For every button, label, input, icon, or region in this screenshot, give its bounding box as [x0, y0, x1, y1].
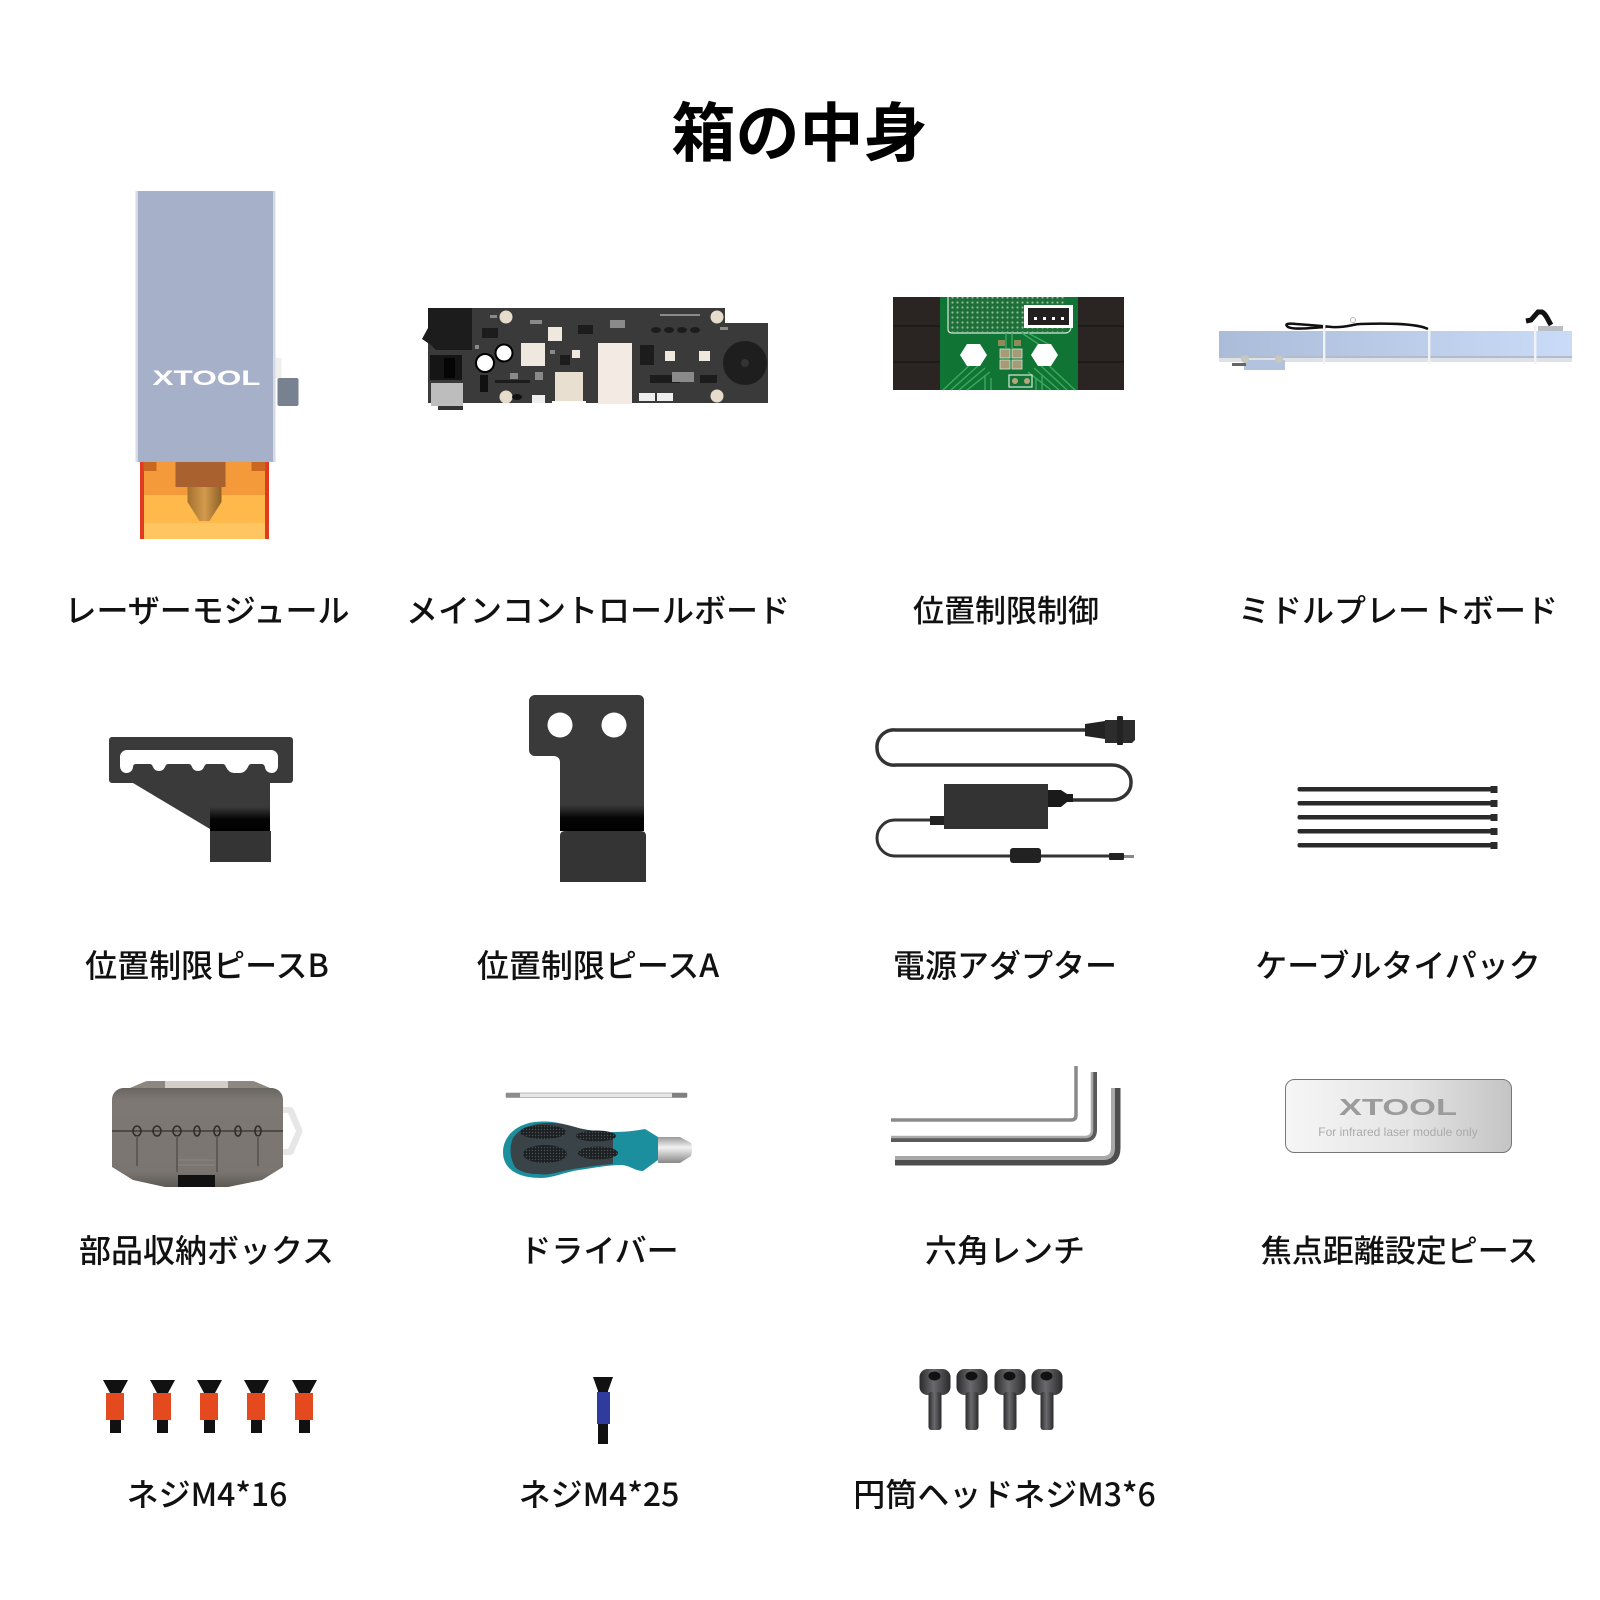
icon: four cap head screws [920, 1369, 1062, 1430]
icon: steel plate: For infrared laser module only [1318, 1125, 1478, 1139]
icon: laser module: XTOOL [152, 367, 261, 390]
icon: steel plate: XTOOL [1339, 1094, 1457, 1120]
panel: hex wrench [891, 1066, 1116, 1272]
panel: middle plate board [1219, 312, 1572, 632]
icon: steel plate [1286, 1080, 1512, 1152]
title: 箱の中身 [672, 83, 928, 175]
label: 円筒ヘッドネジM3*6 [853, 1470, 1156, 1516]
panel: cable tie pack [1255, 786, 1541, 987]
label: ドライバー [519, 1226, 679, 1272]
label: 六角レンチ [925, 1226, 1085, 1272]
label: 焦点距離設定ピース [1261, 1226, 1538, 1271]
panel: laser module [64, 191, 350, 632]
label: メインコントロールボード [406, 586, 790, 632]
label: 位置制限ピースA [477, 941, 719, 987]
panel: position limit control [893, 297, 1124, 631]
panel: screw M4*25 [519, 1377, 679, 1516]
label: レーザーモジュール [64, 586, 350, 632]
icon: circuit board [422, 308, 768, 410]
label: 位置制限ピースB [85, 941, 329, 987]
icon: adapter and cables [877, 716, 1135, 863]
label: ネジM4*25 [519, 1470, 679, 1516]
panel: parts storage box [79, 1081, 334, 1272]
icon: screwdriver and bit [503, 1093, 692, 1178]
label: 電源アダプター [893, 941, 1117, 987]
icon: sensor board [893, 297, 1124, 390]
label: ミドルプレートボード [1238, 586, 1558, 632]
icon: aluminum rail [1219, 312, 1572, 370]
icon: storage box [112, 1081, 302, 1187]
panel: screwdriver [503, 1093, 692, 1272]
panel: position limit piece B [85, 737, 329, 987]
icon: bracket B [109, 737, 293, 862]
panel: main control board [406, 308, 790, 632]
label: ネジM4*16 [127, 1470, 287, 1516]
label: 位置制限制御 [913, 586, 1099, 631]
icon: bracket A [529, 695, 646, 882]
icon: five cable ties [1298, 786, 1498, 849]
icon: three hex keys [891, 1066, 1116, 1161]
icon: five screws with red thread lock [103, 1380, 317, 1433]
label: ケーブルタイパック [1255, 941, 1541, 987]
panel: position limit piece A [477, 695, 719, 987]
panel: screw M4*16 [103, 1380, 317, 1516]
panel: power adapter [877, 716, 1135, 987]
icon: screw with blue thread lock [593, 1377, 613, 1444]
panel: focal distance piece [1261, 1080, 1538, 1271]
label: 部品収納ボックス [79, 1226, 334, 1272]
icon: laser module [136, 191, 298, 539]
panel: cap head screw M3*6 [853, 1369, 1156, 1516]
